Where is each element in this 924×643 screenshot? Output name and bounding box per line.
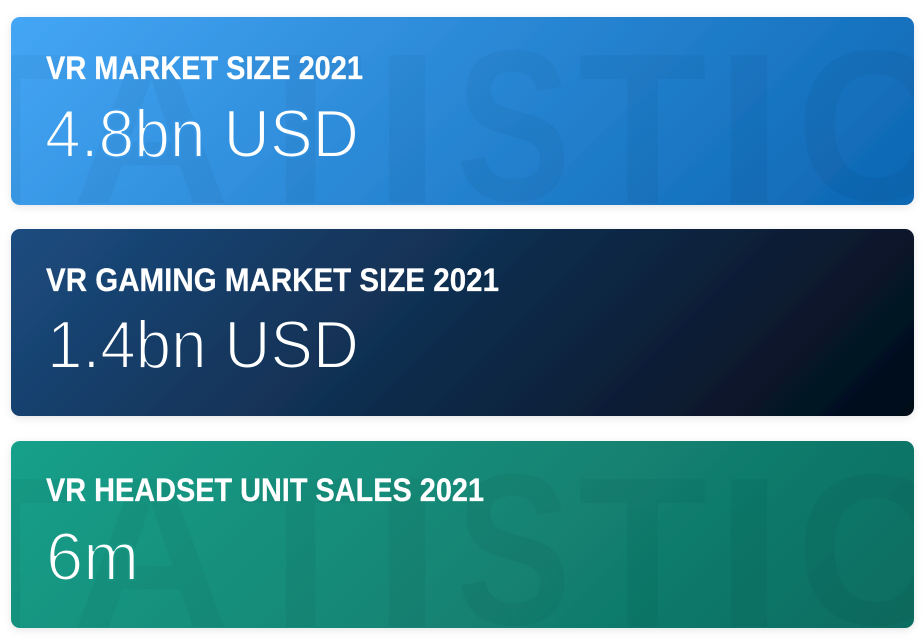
watermark word: STATISTIC: I (372, 8, 442, 249)
card background: navy gradient (11, 229, 914, 416)
value: 1.4bn USD (47, 307, 359, 383)
watermark word: STATISTIC (0, 429, 924, 643)
watermark word: STATISTIC: S (456, 5, 571, 246)
heading: VR HEADSET UNIT SALES 2021 (46, 472, 484, 508)
value: 6m (46, 519, 139, 595)
panel: VR market size (9, 17, 916, 209)
panel: VR gaming market size (11, 229, 914, 416)
watermark word: STATISTIC: I (714, 8, 784, 249)
watermark word: STATISTIC: T (578, 8, 707, 249)
watermark word: STATISTIC: A (72, 8, 230, 249)
watermark word: STATISTIC (11, 56, 559, 203)
card background: teal gradient (11, 441, 914, 628)
heading: VR GAMING MARKET SIZE 2021 (46, 262, 499, 298)
card background: blue gradient (11, 17, 914, 205)
watermark word: STATISTIC: T (238, 8, 363, 249)
panel: VR headset unit sales (9, 441, 916, 632)
value: 4.8bn USD (45, 96, 359, 172)
heading: VR MARKET SIZE 2021 (46, 50, 363, 86)
